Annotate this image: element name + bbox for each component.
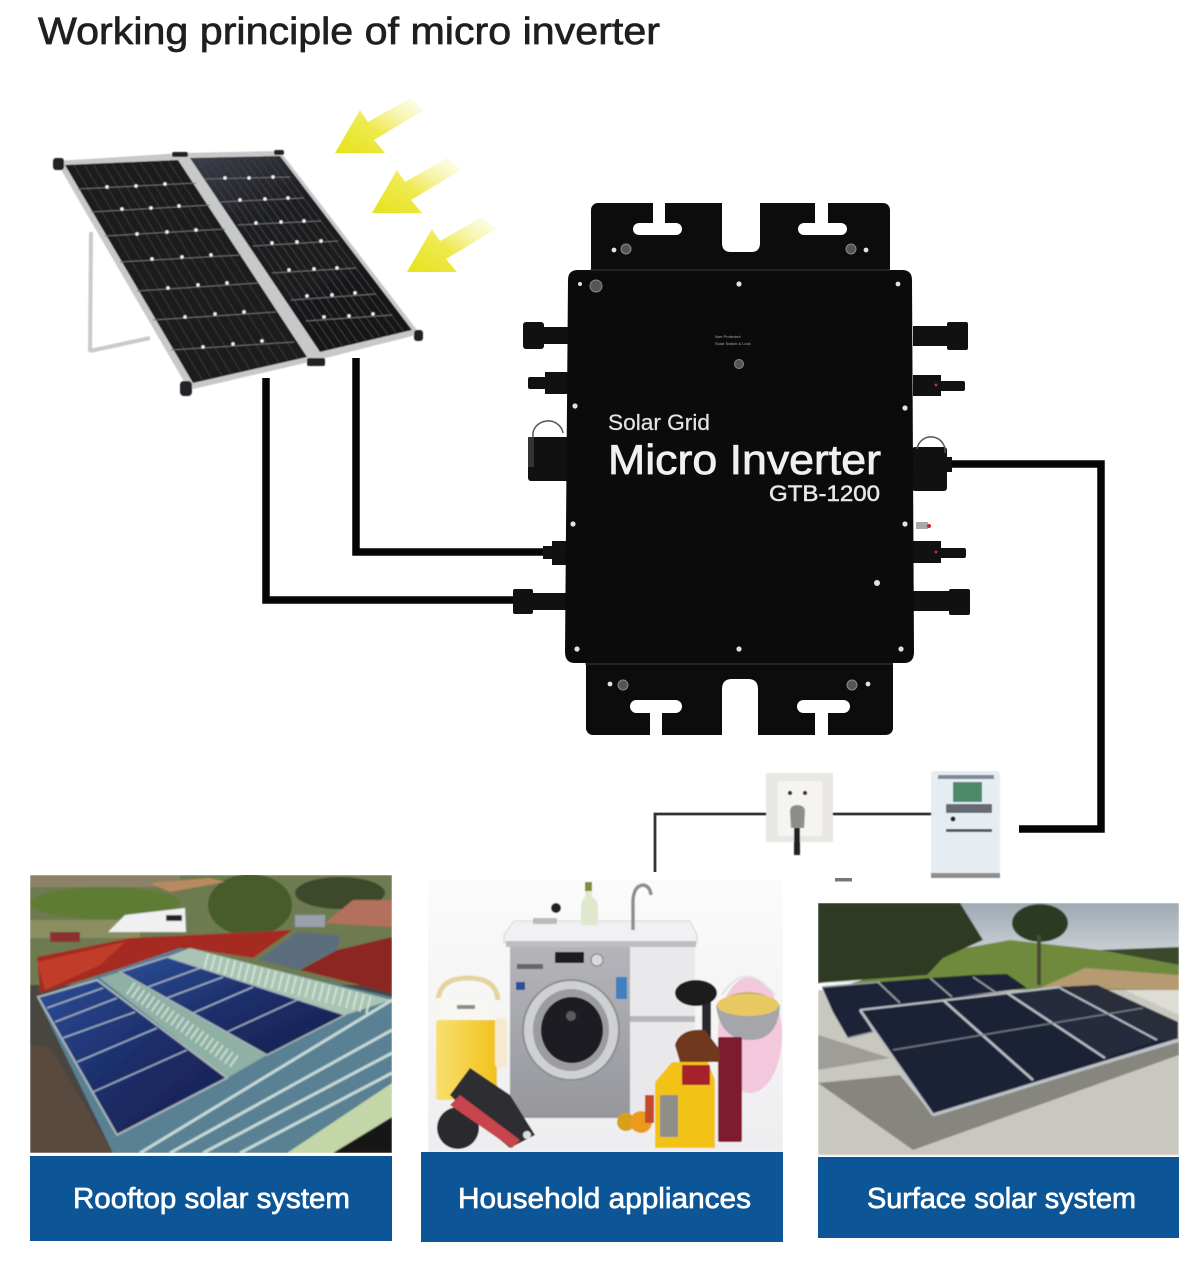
wire: panel to inverter upper xyxy=(356,358,545,552)
oranges xyxy=(617,1111,652,1133)
connectors left xyxy=(513,322,570,614)
concrete ground xyxy=(818,990,1179,1155)
inverter body xyxy=(565,270,914,663)
solar panel illustration xyxy=(53,150,423,396)
inverter xyxy=(513,200,970,740)
roof solar array lower xyxy=(38,980,227,1135)
connectors right xyxy=(912,322,970,615)
ground xyxy=(30,1045,113,1153)
label: rooftop solar system xyxy=(30,1156,392,1241)
model number: GTB-1200 xyxy=(769,481,880,506)
brand line: Solar Grid xyxy=(608,410,710,435)
left module xyxy=(65,160,307,383)
photo: rooftop solar system xyxy=(30,875,392,1153)
label: surface solar system: Surface solar system xyxy=(867,1183,1136,1215)
photo: household appliances xyxy=(428,881,783,1152)
icon: electricity meter xyxy=(931,771,1000,878)
red roofs xyxy=(37,930,293,993)
eave xyxy=(287,1083,392,1153)
product name: Micro Inverter xyxy=(608,436,881,483)
top mounting bracket xyxy=(591,200,890,275)
corner brackets xyxy=(53,150,423,396)
photo: surface solar system xyxy=(818,903,1179,1156)
front row of panels xyxy=(860,985,1178,1115)
slow juicer xyxy=(675,980,742,1142)
title: Working principle of micro inverter xyxy=(38,11,660,53)
washing machine xyxy=(510,947,630,1118)
label: rooftop solar system: Rooftop solar system xyxy=(73,1183,350,1215)
small dash mark xyxy=(835,878,852,882)
water heater xyxy=(258,932,340,970)
label: household appliances xyxy=(421,1152,783,1242)
screws xyxy=(570,248,908,686)
aluminium frame xyxy=(56,151,420,390)
wire: panel to inverter lower xyxy=(266,378,520,600)
right module xyxy=(190,156,412,352)
background trees and houses xyxy=(30,874,392,1153)
wire: meter to socket to appliances xyxy=(655,814,932,872)
label: surface solar system xyxy=(818,1157,1179,1238)
icon: sunlight arrows xyxy=(335,98,496,272)
steamer pot xyxy=(716,976,782,1093)
corrugated roof xyxy=(37,948,392,1153)
washers xyxy=(590,244,857,690)
panel stand xyxy=(90,232,150,352)
icon: wall socket xyxy=(766,773,833,855)
sky and landscape xyxy=(818,903,1179,995)
bottom mounting bracket xyxy=(586,655,893,740)
wire: inverter to meter xyxy=(945,464,1101,829)
sink cabinet xyxy=(504,921,697,1117)
soymilk kettle xyxy=(436,978,507,1100)
vacuum cleaner xyxy=(437,1068,535,1149)
tiny switch text second line: Solar Switch & Lock xyxy=(715,341,751,346)
tiny switch text: Non Protected xyxy=(715,334,741,339)
label: household appliances: Household appliances xyxy=(458,1183,751,1215)
back row of panels xyxy=(822,974,1027,1038)
bottle xyxy=(533,882,598,925)
juice jug xyxy=(655,1062,715,1148)
roof solar array upper xyxy=(120,957,345,1055)
faucet xyxy=(633,885,651,930)
panel shadow xyxy=(818,1042,1179,1150)
